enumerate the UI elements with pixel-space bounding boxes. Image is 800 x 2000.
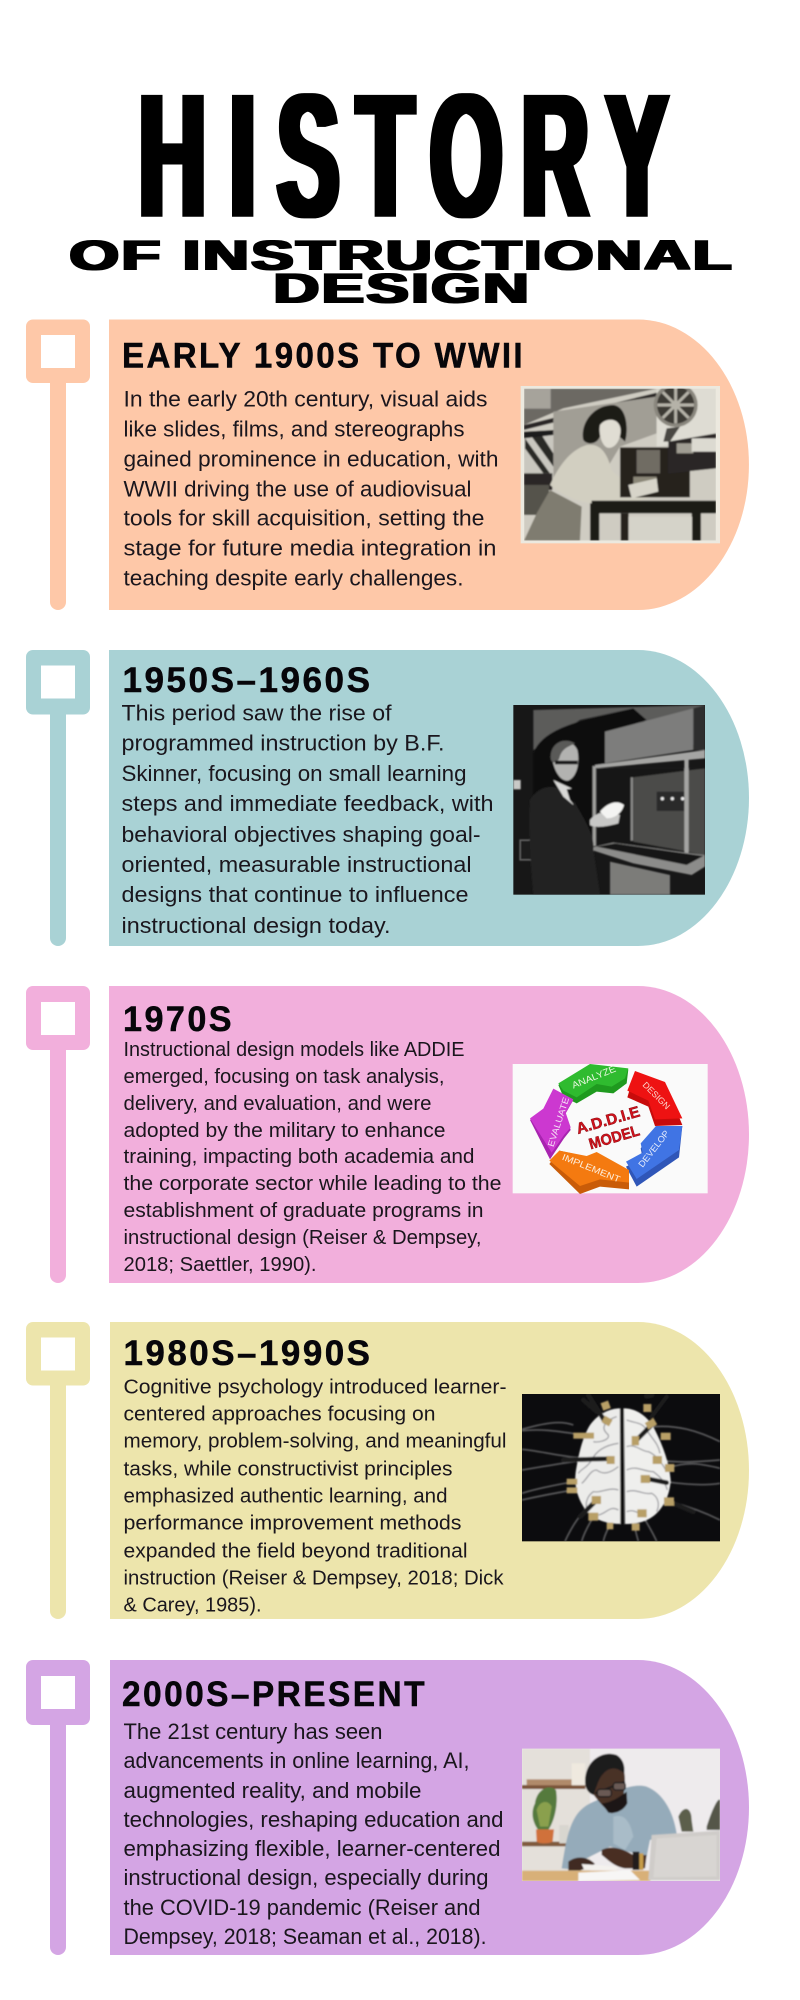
heading: 2000S–PRESENT xyxy=(122,1675,427,1714)
title: HISTORY: HISTORY xyxy=(139,56,668,254)
timeline marker: early 1900s xyxy=(26,320,90,610)
body text: advancements in online learning, AI, xyxy=(124,1748,470,1773)
panel: 1970s xyxy=(109,986,749,1283)
body text: tasks, while constructivist principles xyxy=(124,1458,452,1480)
segment: implement xyxy=(549,1151,629,1194)
photo: B.F. Skinner with pigeon box xyxy=(513,705,705,895)
body text: delivery, and evaluation, and were xyxy=(124,1093,432,1115)
body text: technologies, reshaping education and xyxy=(124,1807,503,1832)
heading: 1980S–1990S xyxy=(124,1334,372,1373)
segment: analyze: ANALYZE xyxy=(570,1064,617,1091)
photo: man studying with laptop xyxy=(522,1749,720,1881)
body text: the corporate sector while leading to the xyxy=(124,1173,502,1195)
segment: evaluate xyxy=(530,1089,573,1159)
body text xyxy=(122,700,494,938)
body text: training, impacting both academia and xyxy=(124,1146,474,1168)
body text: emphasized authentic learning, and xyxy=(124,1486,448,1508)
label: A.D.D.I.E model xyxy=(574,1103,642,1153)
panel: 1950s-1960s xyxy=(109,650,749,946)
body text xyxy=(124,1039,502,1276)
body text: expanded the field beyond traditional xyxy=(124,1540,468,1562)
panel: early 1900s to WWII xyxy=(109,320,749,610)
body text: instructional design today. xyxy=(122,913,390,938)
body text: WWII driving the use of audiovisual xyxy=(124,476,472,502)
timeline marker: 1970s xyxy=(26,986,90,1283)
body text: stage for future media integration in xyxy=(124,536,496,560)
panel: 2000s-present xyxy=(110,1660,749,1955)
body text: tools for skill acquisition, setting the xyxy=(124,506,484,530)
body text xyxy=(124,1376,507,1616)
body text: memory, problem-solving, and meaningful xyxy=(124,1430,507,1452)
body text: behavioral objectives shaping goal- xyxy=(122,822,480,847)
body text: instructional design, especially during xyxy=(124,1865,489,1890)
body text: augmented reality, and mobile xyxy=(124,1778,422,1803)
photo: brain with wired connectors xyxy=(522,1394,720,1541)
body text: Skinner, focusing on small learning xyxy=(122,761,466,786)
body text: 2018; Saettler, 1990). xyxy=(124,1254,316,1276)
diagram: ADDIE model cycle xyxy=(513,1064,708,1194)
body text: steps and immediate feedback, with xyxy=(122,791,494,816)
segment: design: DESIGN xyxy=(641,1080,672,1111)
subtitle: design: DESIGN xyxy=(273,264,531,312)
label: A.D.D.I.E model: MODEL xyxy=(587,1123,642,1153)
heading: 1970S xyxy=(123,1000,234,1039)
title xyxy=(69,56,734,312)
segment: implement: IMPLEMENT xyxy=(561,1152,622,1185)
body text: Cognitive psychology introduced learner- xyxy=(124,1376,506,1398)
segment: analyze xyxy=(558,1064,628,1103)
body text: programmed instruction by B.F. xyxy=(122,730,444,756)
body text: performance improvement methods xyxy=(124,1512,462,1534)
body text: emerged, focusing on task analysis, xyxy=(124,1066,444,1088)
panel: 1980s-1990s xyxy=(110,1322,749,1619)
body text: oriented, measurable instructional xyxy=(122,852,472,877)
body text: the COVID-19 pandemic (Reiser and xyxy=(124,1895,480,1920)
body text: instruction (Reiser & Dempsey, 2018; Dick xyxy=(124,1568,505,1590)
body text: Dempsey, 2018; Seaman et al., 2018). xyxy=(124,1924,486,1949)
label: A.D.D.I.E model: A.D.D.I.E xyxy=(574,1103,642,1138)
photo: woman at film projector xyxy=(521,383,720,543)
segment: design xyxy=(627,1071,682,1126)
body text: designs that continue to influence xyxy=(122,882,468,907)
body text: In the early 20th century, visual aids xyxy=(124,386,488,412)
body text: centered approaches focusing on xyxy=(124,1404,436,1426)
body text: adopted by the military to enhance xyxy=(124,1120,446,1142)
body text: The 21st century has seen xyxy=(124,1719,382,1744)
body text: establishment of graduate programs in xyxy=(124,1200,484,1222)
body text: & Carey, 1985). xyxy=(124,1594,262,1616)
body text: gained prominence in education, with xyxy=(124,446,498,472)
timeline marker: 1950s-1960s xyxy=(26,650,90,946)
segment: develop xyxy=(626,1126,682,1187)
segment: evaluate: EVALUATE xyxy=(546,1096,571,1148)
body text: emphasizing flexible, learner-centered xyxy=(124,1836,500,1861)
body text: teaching despite early challenges. xyxy=(124,566,464,590)
body text xyxy=(124,386,498,590)
subtitle: of instructional: OF INSTRUCTIONAL xyxy=(69,232,734,278)
body text xyxy=(124,1719,503,1949)
heading: EARLY 1900S TO WWII xyxy=(122,336,525,376)
timeline marker: 1980s-1990s xyxy=(26,1322,90,1619)
body text: Instructional design models like ADDIE xyxy=(124,1039,464,1061)
body text: instructional design (Reiser & Dempsey, xyxy=(124,1227,482,1249)
segment: develop: DEVELOP xyxy=(636,1128,671,1169)
body text: This period saw the rise of xyxy=(122,700,392,726)
body text: like slides, films, and stereographs xyxy=(124,416,464,442)
timeline marker: 2000s-present xyxy=(26,1660,90,1955)
heading: 1950S–1960S xyxy=(122,661,372,700)
